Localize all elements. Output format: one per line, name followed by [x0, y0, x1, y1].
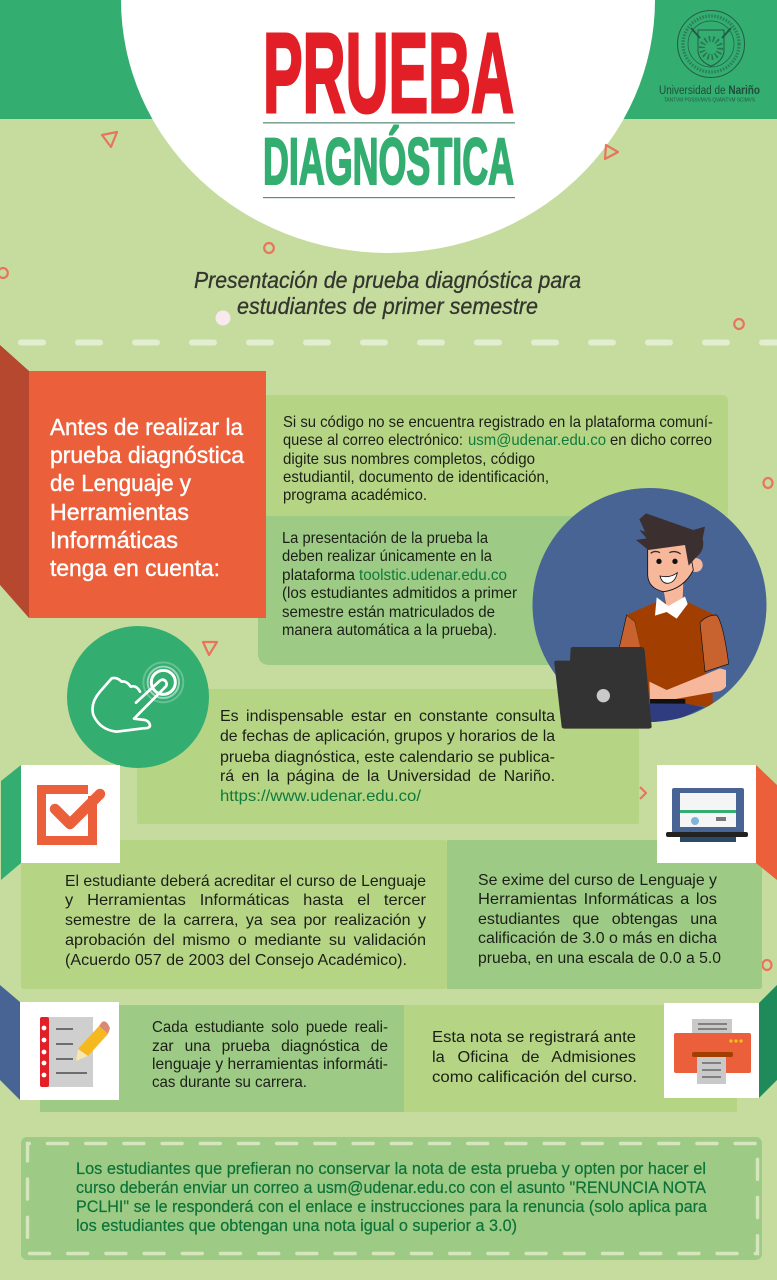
panel: exemption note: Herramientas Informáticas a los — [478, 891, 717, 908]
university logo: TANTVM POSSVMVS QVANTVM SCIMVS — [664, 98, 755, 104]
icon: laptop card — [657, 765, 777, 880]
panel: single attempt note: lenguaje y herramientas informáti- — [152, 1056, 388, 1073]
subtitle — [194, 267, 581, 319]
icon: checkbox card — [1, 765, 120, 880]
panel: waiver notice: PCLHI" se le responderá con el enlace e instrucciones para la renuncia (solo aplica para — [76, 1198, 708, 1216]
university logo — [659, 10, 760, 104]
pale dot — [216, 310, 230, 326]
panel: registration note: en dicho correo — [610, 432, 712, 449]
panel: single attempt note: cas durante su carrera. — [152, 1074, 307, 1091]
panel: calendar note: rá en la página de la Universidad de Nariño. — [220, 768, 555, 785]
panel: registration note: digite sus nombres completos, código — [283, 451, 535, 468]
panel: accreditation note — [21, 840, 447, 989]
panel: exemption note: Se exime del curso de Lenguaje y — [478, 872, 717, 889]
panel: orange heading — [0, 345, 266, 618]
decorative shapes — [0, 132, 772, 970]
panel: single attempt note: zar una prueba diagnóstica de — [152, 1038, 388, 1055]
panel: platform note: plataforma — [282, 567, 355, 584]
panel: registration note: estudiantil, documento de identificación, — [283, 469, 549, 486]
panel: grade registration note: Esta nota se registrará ante — [432, 1029, 636, 1046]
panel: orange heading: Antes de realizar la — [50, 414, 243, 440]
panel: calendar note — [137, 689, 639, 824]
icon: person with laptop — [532, 488, 766, 729]
panel: single attempt note — [40, 1005, 404, 1112]
panel: exemption note: estudiantes que obtengas una — [478, 911, 717, 928]
panel: calendar note: https://www.udenar.edu.co/ — [220, 788, 422, 805]
panel: accreditation note: El estudiante deberá acreditar el curso de Lenguaje — [65, 873, 426, 890]
panel: platform note: La presentación de la prueba la — [282, 530, 488, 547]
panel: orange heading: prueba diagnóstica — [50, 442, 244, 468]
panel: accreditation note: (Acuerdo 057 de 2003 del Consejo Académico). — [65, 952, 407, 969]
panel: exemption note — [447, 840, 762, 989]
panel: exemption note: calificación de 3.0 o más en dicha — [478, 930, 717, 947]
panel: accreditation note: y Herramientas Informáticas hasta el tercer — [65, 892, 427, 909]
panel: orange heading: Informáticas — [50, 527, 178, 553]
university logo: Universidad de Nariño — [659, 85, 760, 97]
panel: registration note: quese al correo electrónico: — [283, 432, 463, 449]
panel: calendar note: prueba diagnóstica, este calendario se publica- — [220, 749, 555, 766]
icon: printer card — [664, 985, 777, 1098]
title word: PRUEBA: PRUEBA — [263, 10, 514, 136]
panel: platform note: manera automática a la prueba). — [282, 622, 497, 639]
panel: platform note: deben realizar únicamente en la — [282, 548, 492, 565]
panel: orange heading: de Lenguaje y — [50, 470, 191, 496]
panel: single attempt note: Cada estudiante solo puede reali- — [152, 1019, 388, 1036]
icon: notepad card — [0, 985, 119, 1100]
panel: exemption note: prueba, en una escala de 0.0 a 5.0 — [478, 950, 721, 967]
icon: pointing hand in green circle — [67, 626, 209, 768]
top green band — [0, 0, 777, 119]
panel: registration note — [266, 395, 728, 516]
subtitle: estudiantes de primer semestre — [237, 293, 538, 319]
title — [263, 10, 515, 198]
panel: registration note: programa académico. — [283, 487, 427, 504]
dashed divider — [21, 340, 777, 346]
white title ellipse — [121, 0, 655, 253]
panel: platform note — [258, 516, 610, 665]
panel: accreditation note: aprobación del mismo o mediante su validación — [65, 932, 426, 949]
subtitle: Presentación de prueba diagnóstica para — [194, 267, 581, 293]
panel: registration note: usm@udenar.edu.co — [468, 432, 606, 449]
panel: calendar note: de fechas de aplicación, grupos y horarios de la — [220, 728, 555, 745]
panel: orange heading: Herramientas — [50, 499, 189, 525]
panel: waiver notice: Los estudiantes que prefieran no conservar la nota de esta prueba y opten por hacer el — [76, 1160, 706, 1178]
panel: registration note: Si su código no se encuentra registrado en la plataforma comuní- — [283, 414, 713, 431]
panel: waiver notice — [21, 1137, 762, 1260]
panel: platform note: toolstic.udenar.edu.co — [359, 567, 507, 584]
panel: orange heading: tenga en cuenta: — [50, 555, 220, 581]
panel: waiver notice: los estudiantes que obtengan una nota igual o superior a 3.0) — [76, 1217, 517, 1235]
panel: grade registration note — [404, 1005, 737, 1112]
panel: grade registration note: como calificación del curso. — [432, 1069, 637, 1086]
panel: grade registration note: la Oficina de Admisiones — [432, 1049, 636, 1066]
panel: accreditation note: semestre de la carrera, ya sea por realización y — [65, 912, 426, 929]
title word: DIAGNÓSTICA: DIAGNÓSTICA — [263, 124, 514, 198]
panel: platform note: semestre están matriculados de — [282, 604, 495, 621]
panel: calendar note: Es indispensable estar en constante consulta — [220, 708, 555, 725]
panel: platform note: (los estudiantes admitidos a primer — [282, 585, 518, 602]
panel: waiver notice: curso deberán enviar un correo a usm@udenar.edu.co con el asunto "RENUNCIA NOTA — [76, 1179, 706, 1197]
